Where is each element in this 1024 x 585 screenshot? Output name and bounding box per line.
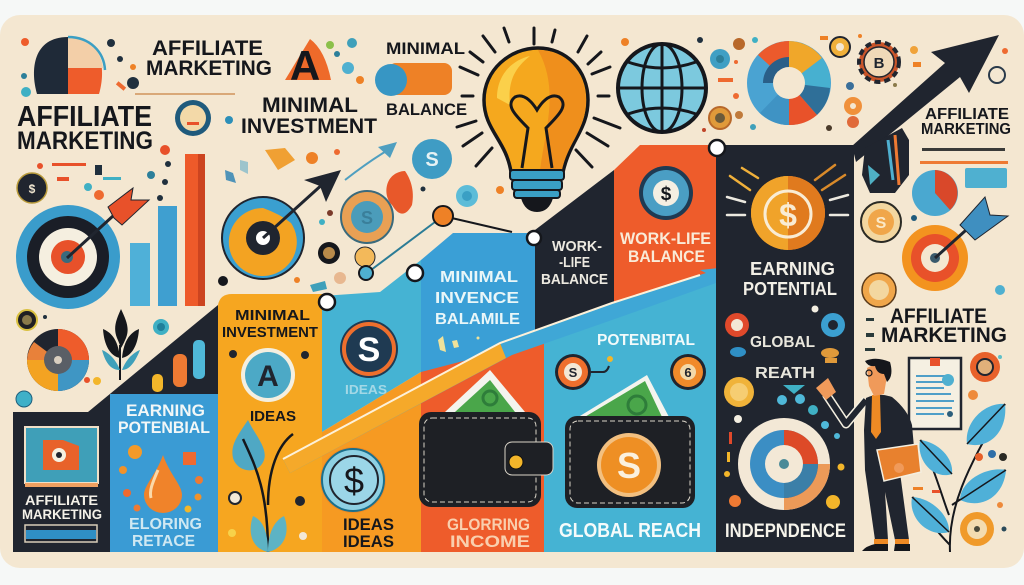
icon: laptop	[25, 427, 98, 487]
arrow: growth arrow across steps	[283, 266, 738, 473]
heading: earning potential	[118, 401, 210, 437]
icon: globe	[618, 44, 706, 132]
label: global reath: GLOBAL	[750, 334, 815, 351]
lines right	[920, 148, 1008, 164]
heading: earning potential: EARNING	[750, 259, 835, 279]
icon: sprout	[228, 350, 309, 552]
icon: leafy plant right	[911, 390, 1007, 552]
icon: wallet	[565, 375, 695, 508]
chart: left bars	[130, 154, 205, 306]
heading: minimal balance	[386, 39, 467, 119]
label: work-life balance: BALANCE	[541, 271, 608, 288]
heading: affiliate marketing large	[17, 101, 153, 155]
label: ideas ideas	[343, 515, 394, 551]
panel: dark earning potential and independence	[716, 145, 854, 552]
icon: coins and nodes: S	[361, 208, 373, 228]
panel: orange work-life balance	[614, 145, 716, 315]
icon: center target with arrow	[222, 170, 341, 279]
icon: black wallet with cash	[419, 370, 553, 507]
panel: dark affiliate marketing step	[13, 305, 218, 552]
icon: right coin: S	[876, 215, 887, 232]
icon: wallet: S	[617, 445, 641, 486]
chart: right pie	[912, 170, 958, 216]
heading: minimal investment: MINIMAL	[262, 94, 358, 117]
confetti: scattered bits right	[621, 34, 921, 132]
icon: letter A	[285, 39, 331, 89]
heading: affiliate marketing: MARKETING	[22, 506, 102, 522]
heading: affiliate marketing lower right: AFFILIATE	[890, 305, 987, 328]
icon: pill	[375, 63, 452, 96]
chart: ring target	[738, 418, 830, 510]
icon: dollar coin: $	[344, 460, 364, 501]
icon: small coins	[555, 354, 706, 390]
icon: S coin: S	[358, 331, 380, 369]
label: independence: INDEPNDENCE	[725, 521, 846, 542]
panel: red glorring income	[421, 340, 544, 552]
icon: teal tag	[965, 168, 1007, 188]
icon: coin by heading	[17, 100, 211, 203]
icon: S coin	[340, 320, 398, 378]
icon: lower left ring and pie	[16, 310, 169, 407]
heading: affiliate marketing small: AFFILIATE	[152, 37, 263, 60]
label: glorring income: GLORRING	[447, 515, 530, 534]
panel: teal global reach	[544, 280, 716, 552]
icon: A badge: A	[257, 360, 279, 393]
label: eloring retace: ELORING	[129, 516, 202, 533]
icon: coins and nodes: S	[425, 149, 439, 171]
panel: blue earning potential	[110, 394, 218, 552]
label: ideas: IDEAS	[250, 408, 296, 425]
label: ideas ideas: IDEAS	[343, 515, 394, 534]
icon: right target with arrow	[902, 48, 1008, 295]
heading: affiliate marketing small	[146, 37, 272, 80]
label: ideas ideas: IDEAS	[343, 532, 394, 551]
heading: minimal investment: MINIMAL	[235, 307, 310, 324]
icon: white milestone dots	[319, 140, 725, 310]
heading: minimal invence balamile: MINIMAL	[440, 269, 518, 286]
heading: minimal balance: MINIMAL	[386, 39, 465, 58]
icon: dollar badge: $	[661, 184, 672, 205]
panel: orange ideas	[320, 372, 421, 552]
panel: yellow minimal investment	[218, 294, 322, 552]
icon: gear	[859, 42, 899, 82]
heading: work-life balance: BALANCE	[628, 247, 705, 266]
icon: small plant	[102, 309, 140, 380]
icon: small bars	[152, 340, 205, 392]
label: work-life balance: WORK-	[552, 238, 602, 255]
icon: small coins: 6	[684, 365, 692, 380]
icon: dollar coin	[320, 447, 386, 513]
heading: minimal invence balamile: BALAMILE	[435, 311, 520, 328]
label: glorring income	[447, 515, 530, 551]
label: work-life balance: -LIFE	[559, 254, 590, 271]
heading: affiliate marketing	[22, 492, 102, 522]
label: glorring income: INCOME	[450, 532, 530, 551]
confetti	[438, 336, 480, 352]
heading: earning potential	[743, 259, 837, 299]
icon: right chart badge	[862, 128, 909, 193]
label: eloring retace	[129, 516, 202, 550]
label: potenbital: POTENBITAL	[597, 332, 695, 349]
icon: ball cluster	[724, 306, 845, 509]
heading: affiliate marketing right	[921, 106, 1011, 138]
label: eloring retace: RETACE	[132, 533, 195, 550]
confetti: scattered bits left	[21, 38, 504, 292]
heading: affiliate marketing lower right	[881, 305, 1007, 347]
heading: minimal investment: INVESTMENT	[241, 115, 377, 138]
icon: document	[909, 358, 961, 429]
heading: earning potential: EARNING	[126, 401, 205, 420]
bar: progress	[25, 525, 97, 542]
arrow: big dark rising arrow	[852, 35, 999, 162]
heading: earning potential: POTENBIAL	[118, 418, 210, 437]
icon: person presenting	[816, 359, 921, 551]
icon: dollar badge	[639, 166, 693, 220]
label: work-life balance	[541, 238, 608, 288]
heading: affiliate marketing lower right: MARKETING	[881, 324, 1007, 347]
chart: donut	[747, 41, 831, 125]
icon: A badge	[241, 348, 295, 402]
icon: gear: B	[874, 55, 885, 72]
panel: blue minimal invence	[421, 233, 535, 372]
icon: earning coin with rays	[727, 165, 848, 250]
icon: orange drop	[119, 445, 203, 513]
icon: coin by heading: $	[29, 182, 36, 196]
icon: earning coin with rays: $	[779, 197, 797, 233]
heading: earning potential: POTENTIAL	[743, 279, 837, 299]
heading: affiliate marketing right: AFFILIATE	[925, 106, 1009, 123]
heading: affiliate marketing small: MARKETING	[146, 57, 272, 80]
heading: affiliate marketing right: MARKETING	[921, 121, 1011, 138]
heading: minimal invence balamile	[435, 269, 520, 328]
dashes right	[865, 318, 875, 351]
icon: badge right	[970, 352, 1002, 382]
heading: work-life balance: WORK-LIFE	[620, 229, 711, 248]
icon: letter A: A	[290, 42, 320, 89]
icon: light bulb	[457, 28, 620, 212]
icon: right coin	[861, 202, 901, 307]
heading: minimal investment	[241, 94, 377, 138]
label: global reath	[750, 334, 815, 382]
label: global reach: GLOBAL REACH	[559, 520, 701, 542]
heading: work-life balance	[620, 229, 711, 266]
label: global reath: REATH	[755, 365, 815, 382]
panel: dark work-life balance	[535, 170, 614, 340]
heading: affiliate marketing large: MARKETING	[17, 127, 153, 155]
panel: teal ideas	[322, 260, 421, 432]
heading: minimal invence balamile: INVENCE	[435, 290, 519, 307]
label: ideas: IDEAS	[345, 382, 387, 397]
icon: left target with arrow	[16, 188, 149, 309]
chart: lower left pie	[27, 329, 89, 391]
icon: coins and nodes	[218, 139, 512, 286]
heading: affiliate marketing: AFFILIATE	[25, 492, 98, 508]
heading: minimal investment	[222, 307, 318, 341]
heading: affiliate marketing large: AFFILIATE	[17, 101, 152, 133]
heading: minimal investment: INVESTMENT	[222, 324, 318, 341]
icon: half dome chart	[34, 37, 105, 94]
heading: minimal balance: BALANCE	[386, 100, 467, 119]
icon: small coins: S	[569, 365, 578, 380]
